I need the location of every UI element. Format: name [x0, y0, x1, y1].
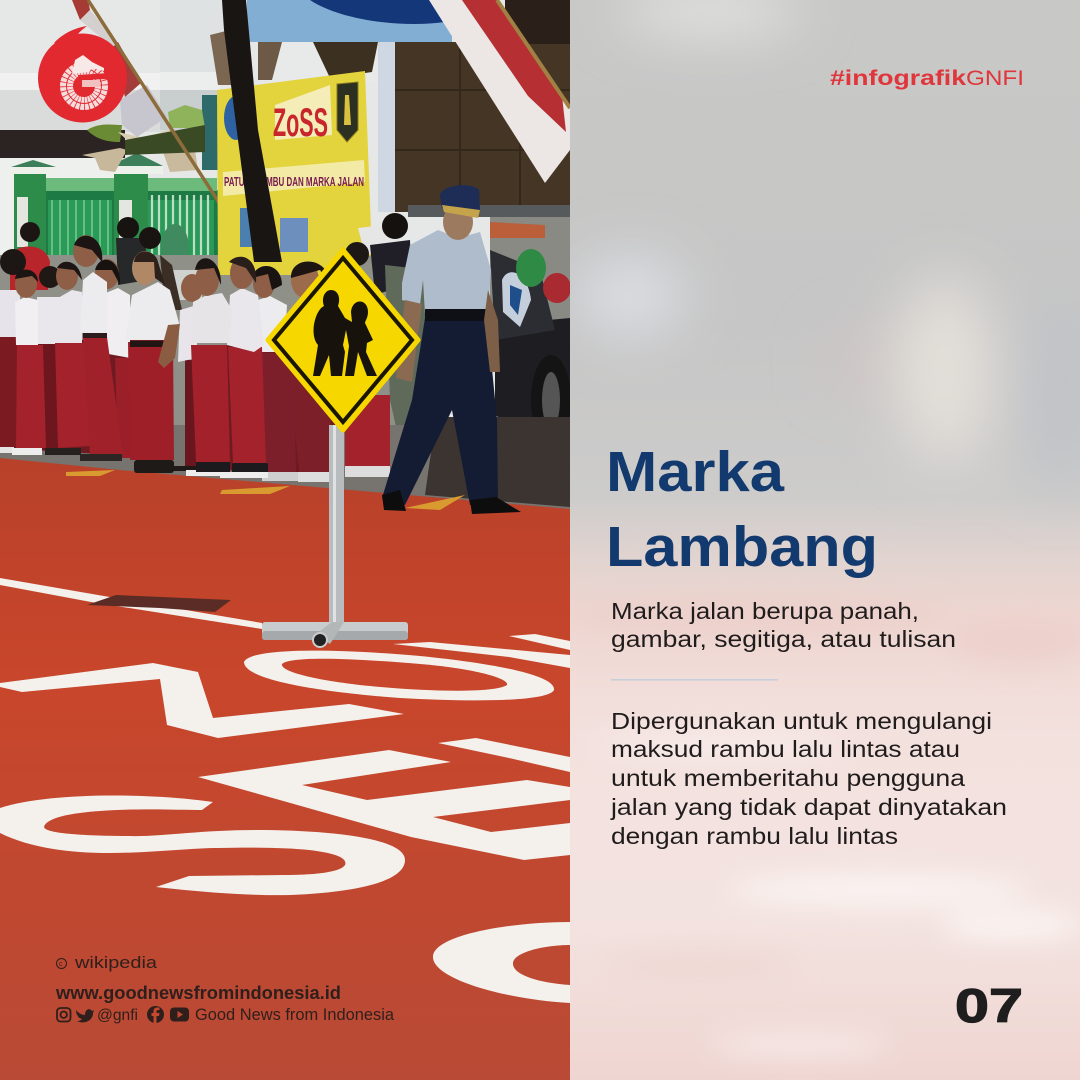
photo credit: wikipedia — [74, 953, 158, 972]
yellow ZoSS board: ZoSS — [273, 101, 328, 145]
photo credit: c — [59, 961, 63, 968]
traffic officer — [382, 185, 521, 514]
background people behind kids — [0, 217, 400, 425]
icon: two walking children silhouette — [313, 290, 377, 376]
child 11 — [252, 266, 298, 481]
page number: 07 — [955, 979, 1023, 1032]
child 5 — [73, 235, 123, 461]
icon: instagram — [57, 1008, 70, 1022]
child far right behind sign — [345, 242, 390, 477]
definition text: Marka jalan berupa panah, — [611, 598, 919, 624]
child 2 — [12, 270, 46, 455]
green fence and gate — [11, 154, 218, 255]
title: Marka — [606, 440, 785, 503]
credits and social footer — [55, 953, 395, 1024]
yellow ZoSS board: PATUHI RAMBU DAN MARKA JALAN — [224, 174, 364, 189]
right panel: blurred photo backdrop — [570, 0, 1080, 1080]
description text: jalan yang tidak dapat dinyatakan — [610, 794, 1007, 820]
right flag — [429, 0, 570, 183]
maroon trousers backing — [0, 340, 340, 478]
sidewalk — [0, 425, 570, 512]
definition text: gambar, segitiga, atau tulisan — [611, 626, 956, 652]
icon: twitter — [76, 1009, 94, 1022]
school zone sign on pole — [262, 250, 418, 647]
background people and motorbikes — [358, 205, 570, 425]
yellow ZoSS board — [217, 71, 372, 275]
road markings: painted white letters — [0, 578, 570, 1003]
description text: Dipergunakan untuk mengulangi — [611, 708, 992, 734]
child 7 — [125, 251, 180, 473]
description text: untuk memberitahu pengguna — [611, 765, 965, 791]
hashtag: GNFI — [966, 66, 1024, 90]
row of schoolchildren — [0, 235, 390, 482]
website url: www.goodnewsfromindonesia.id — [55, 983, 341, 1003]
channel name: Good News from Indonesia — [195, 1006, 395, 1024]
building background — [0, 0, 570, 417]
child 1 — [0, 249, 26, 453]
child 6 — [95, 259, 130, 458]
photo credit — [56, 956, 157, 972]
description text — [610, 708, 1007, 849]
left flag on pole — [72, 0, 218, 204]
description text: dengan rambu lalu lintas — [611, 823, 898, 849]
road sign banner — [247, 0, 452, 42]
child behind sign — [290, 262, 331, 482]
social handle: @gnfi — [97, 1007, 138, 1024]
child 8 — [172, 274, 203, 471]
icon: facebook — [147, 1006, 164, 1023]
icon: youtube — [170, 1008, 189, 1022]
road surface — [0, 458, 570, 1080]
divider — [611, 679, 778, 681]
child 10 — [220, 257, 268, 478]
title: Lambang — [606, 515, 878, 578]
child 4 — [45, 262, 90, 455]
photo panel: school zone road scene — [0, 0, 571, 1080]
GNFI logo — [38, 26, 127, 122]
title — [606, 440, 878, 578]
hashtag: #infografik — [830, 66, 966, 90]
palm leaves — [82, 105, 205, 172]
description text: maksud rambu lalu lintas atau — [611, 736, 960, 762]
tree trunk — [222, 0, 282, 262]
sign shadow on road — [87, 595, 231, 612]
child 9 — [186, 258, 232, 476]
child 3 — [37, 266, 60, 344]
hashtag — [830, 66, 1024, 90]
definition text — [611, 598, 956, 652]
